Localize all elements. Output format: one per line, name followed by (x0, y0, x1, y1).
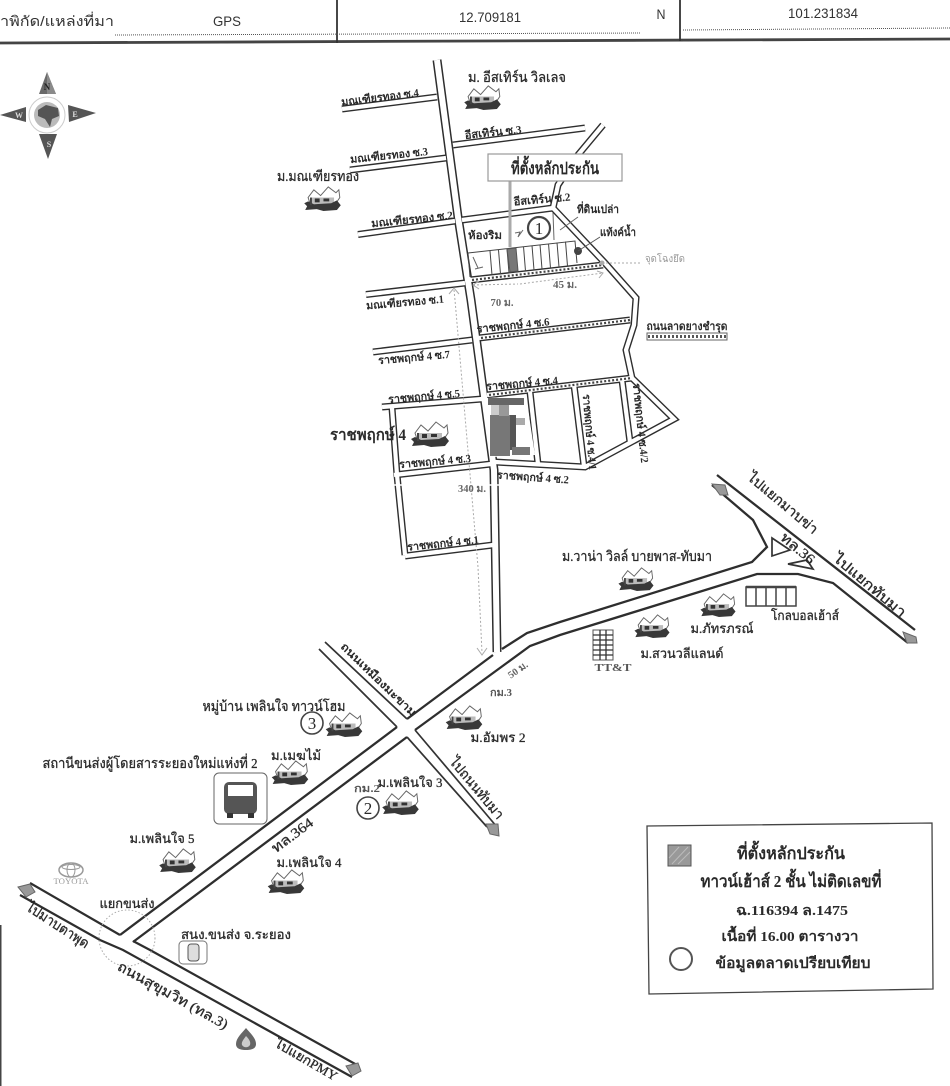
legend strip: damaged road (647, 333, 727, 340)
label: 70 m: 70 ม. (490, 298, 514, 309)
legend title: ที่ตั้งหลักประกัน (737, 840, 845, 863)
label: 340 m: 340 ม. (458, 484, 487, 495)
label: highway 36: ทล.36 (777, 531, 817, 568)
label: Phattharaphon: ม.ภัทรภรณ์ (690, 621, 754, 636)
label: to Thap Ma junction: ไปแยกทับมา (829, 549, 910, 621)
icon: house Mekmai (272, 761, 308, 785)
label: Monthian Thong soi 4: มณเฑียรทอง ซ.4 (341, 86, 420, 109)
building: TT&T (593, 630, 632, 674)
icon: compass: E (72, 110, 78, 119)
traffic islands (772, 538, 790, 556)
header label: าพิกัด/แหล่งที่มา (0, 12, 114, 29)
label: km 2: กม.2 (354, 784, 380, 795)
logo: toyota: TOYOTA (54, 877, 89, 886)
icon: compass: S (47, 140, 52, 149)
icon: bus station (214, 773, 267, 824)
dimension lines (449, 260, 640, 655)
latitude: 12.709181 (459, 9, 521, 25)
header rule (0, 39, 950, 43)
cross road (319, 642, 497, 827)
label: Eastern soi 2: อีสเทิร์น ซ.2 (513, 190, 571, 208)
label: to PMY junction: ไปแยกPMY (271, 1035, 341, 1084)
label: 45 m: 45 ม. (553, 280, 578, 291)
label: new Rayong bus station: สถานีขนส่งผู้โดยสารระยองใหม่แห่งที่ 2 (42, 754, 258, 772)
marker 3 (301, 712, 323, 734)
building: TT&T: TT&T (594, 662, 632, 674)
box: collateral location (488, 154, 622, 181)
label: Monthian Thong soi 3: มณเฑียรทอง ซ.3 (350, 145, 429, 166)
label: vacant land: ที่ดินเปล่า (577, 201, 619, 216)
legend comparison label: ข้อมูลตลาดเปรียบเทียบ (716, 955, 870, 973)
label: Rayong transport office: สนง.ขนส่ง จ.ระยอง (181, 927, 291, 942)
icon: house Phattharaphon (700, 594, 736, 617)
label: Ratchaphruek 4 soi 5: ราชพฤกษ์ 4 ซ.5 (388, 387, 461, 406)
GPS value: GPS (213, 13, 241, 29)
label: shop unit: ห้องริม (468, 229, 502, 242)
scan edge line (0, 925, 2, 1086)
icon: house Wana Ville (618, 568, 654, 591)
housing icons (159, 86, 736, 894)
label: Ratchaphruek 4 soi 2: ราชพฤกษ์ 4 ซ.2 (497, 469, 570, 487)
icon: house Suan Wali Land (634, 615, 670, 638)
label: Ratchaphruek 4 village: ราชพฤกษ์ 4 (330, 425, 406, 444)
legend deed: ฉ.116394 ล.1475 (736, 904, 848, 919)
icon: petrol station flame (236, 1028, 256, 1050)
label: 50 m: 50 ม. (506, 659, 531, 681)
box: collateral location: ที่ตั้งหลักประกัน (511, 155, 599, 178)
N label: N (656, 6, 666, 22)
label: Khon Song junction: แยกขนส่ง (100, 896, 154, 911)
icon: compass: N (44, 82, 51, 92)
icon: house Ratchaphruek 4 (411, 422, 449, 447)
marker 1: 1 (535, 219, 543, 238)
logo: toyota (54, 863, 89, 886)
header table (0, 0, 950, 43)
building: Global House (746, 587, 796, 606)
longitude: 101.231834 (788, 5, 858, 21)
label: Wana Ville: ม.วาน่า วิลล์ บายพาส-ทับมา (562, 548, 712, 565)
label: Ratchaphruek 4 soi 4: ราชพฤกษ์ 4 ซ.4 (486, 374, 559, 393)
pointer from label box (508, 180, 512, 247)
icon: house Amphon 2 (446, 706, 482, 730)
label: Ploenjai 3: ม.เพลินใจ 3 (378, 775, 442, 790)
label: Suan Wali Land: ม.สวนวลีแลนด์ (640, 646, 724, 661)
site lots (468, 180, 600, 277)
Sukhumvit road (20, 883, 357, 1077)
nearby housing smudge block (487, 396, 535, 457)
label: Ratchaphruek 4 soi 1: ราชพฤกษ์ 4 ซ.1 (407, 533, 480, 554)
scan gap across roads (390, 484, 502, 486)
icon: house Ploenjai 3 (382, 791, 419, 815)
icon: house Ploenjai 5 (159, 849, 196, 873)
legend area: เนื้อที่ 16.00 ตารางวา (722, 925, 858, 945)
legend swatch: collateral (668, 845, 691, 866)
panel: legend (647, 823, 933, 994)
label: Ploenjai Townhome: หมู่บ้าน เพลินใจ ทาวน์โฮม (202, 698, 346, 715)
label: Ratchaphruek 4 soi 6: ราชพฤกษ์ 4 ซ.6 (476, 315, 551, 336)
icon: compass (0, 72, 96, 159)
label: Ratchaphruek 4 soi 4/2: ราชพฤกษ์ 4 ซ.4/2 (630, 383, 651, 464)
icon: car (179, 941, 207, 964)
label: Amphon 2: ม.อัมพร 2 (470, 730, 526, 745)
label: to Thap Ma road: ไปถนนทับมา (445, 753, 508, 823)
damaged paved road dots (472, 265, 632, 395)
icon: house Eastern Village (464, 86, 501, 110)
marker 2: 2 (364, 799, 372, 818)
label: Eastern Village: ม. อีสเทิร์น วิลเลจ (468, 69, 566, 86)
marker 1 (528, 217, 550, 239)
marker 2 (357, 797, 379, 819)
legend circle (670, 948, 692, 970)
label: Ratchaphruek 4 soi 4/1: ราชพฤกษ์ 4 ซ.4/1 (580, 394, 599, 470)
marker 3: 3 (308, 714, 316, 733)
label: to Map Kha junction: ไปแยกมาบข่า (743, 468, 821, 538)
legend subtitle: ทาวน์เฮ้าส์ 2 ชั้น ไม่ติดเลขที่ (700, 868, 882, 891)
label: water tank: แท้งค์น้ำ (600, 224, 636, 239)
label: reference point: จุดโฉงยึด (645, 252, 685, 265)
icon: house Ploenjai Townhome (326, 713, 362, 737)
label: Ratchaphruek 4 soi 3: ราชพฤกษ์ 4 ซ.3 (399, 452, 472, 471)
label: Ploenjai 4: ม.เพลินใจ 4 (276, 855, 342, 870)
label: Sukhumvit road: ถนนสุขุมวิท (ทล.3) (114, 960, 230, 1033)
icon: compass: W (15, 111, 23, 120)
icon: house Ploenjai 4 (268, 870, 304, 894)
label: Mekmai: ม.เมฆไม้ (271, 748, 321, 763)
label: to Map Ta Phut: ไปมาบตาพุด (22, 898, 93, 952)
label: Monthian Thong village: ม.มณเฑียรทอง (277, 169, 359, 185)
label: Monthian Thong soi 2: มณเฑียรทอง ซ.2 (371, 209, 454, 230)
label: damaged paved road: ถนนลาดยางชำรุด (646, 320, 728, 334)
water tank (574, 248, 582, 254)
label: Mueang Makham road: ถนนเหมืองมะขาม (338, 640, 419, 719)
junction dotted circle (99, 910, 155, 966)
label: Eastern soi 3: อีสเทิร์น ซ.3 (464, 123, 523, 142)
label: highway 364: ทล.364 (269, 816, 317, 857)
label: Ploenjai 5: ม.เพลินใจ 5 (130, 831, 194, 846)
label: Ratchaphruek 4 soi 7: ราชพฤกษ์ 4 ซ.7 (378, 348, 451, 367)
arrow heads (18, 884, 35, 897)
icon: house Monthian Thong (304, 187, 341, 211)
label: Monthian Thong soi 1: มณเฑียรทอง ซ.1 (366, 293, 444, 312)
label: km 3: กม.3 (490, 688, 512, 699)
highway 364 and highway 36 (120, 475, 915, 942)
label: Global House: โกลบอลเฮ้าส์ (771, 608, 839, 623)
hatched subject lot (507, 248, 518, 272)
